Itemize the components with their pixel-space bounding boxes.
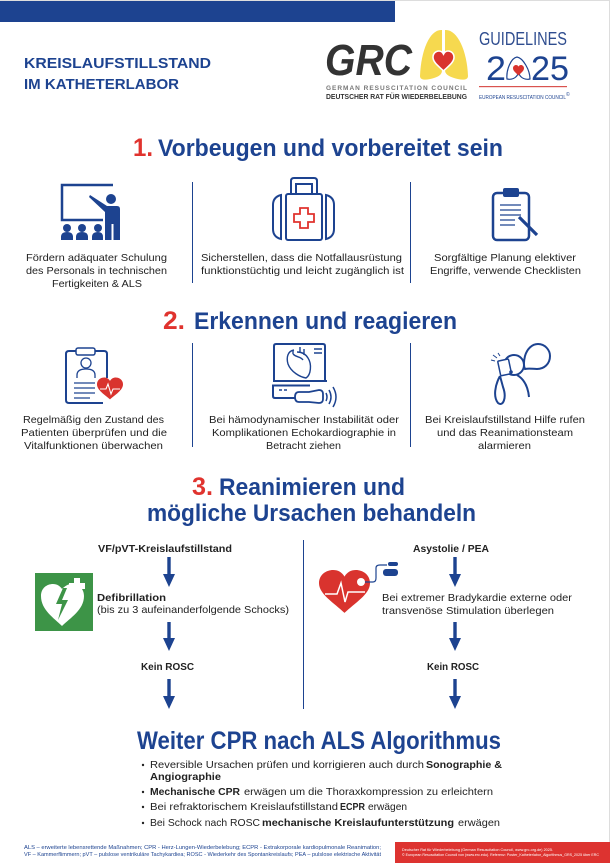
panel: shockable path bbox=[35, 543, 289, 709]
text: bradycardia: Bei extremer Bradykardie externe oder bbox=[382, 592, 573, 604]
bullet list bbox=[142, 759, 502, 829]
label: no ROSC: Kein ROSC bbox=[141, 661, 194, 673]
text: equipment: Sicherstellen, dass die Notfallausrüstung bbox=[201, 252, 402, 264]
text: monitoring: Vitalfunktionen überwachen bbox=[24, 440, 163, 452]
heading 3: mögliche Ursachen behandeln bbox=[147, 500, 476, 527]
logo: Guidelines 2025: 2 bbox=[486, 50, 506, 88]
arrow bbox=[449, 557, 461, 587]
text: equipment: funktionstüchtig und leicht zugänglich ist bbox=[201, 265, 404, 277]
icon: emergency kit bbox=[273, 178, 334, 240]
text: call help bbox=[425, 414, 585, 452]
footer abbreviations: VF – Kammerflimmern; pVT – pulslose ventrikuläre Tachykardiea; ROSC - Wiederkehr des Spontankreislaufs; PEA – pulslose elektrische Aktivität bbox=[24, 852, 382, 858]
title: IM KATHETERLABOR bbox=[24, 76, 179, 93]
bullet list: erwägen um die Thoraxkompression zu erleichtern bbox=[244, 786, 493, 798]
icon: heart with pacemaker bbox=[319, 562, 398, 613]
logo: Guidelines 2025: EUROPEAN RESUSCITATION COUNCIL bbox=[479, 95, 566, 101]
logo: GRC: DEUTSCHER RAT FÜR WIEDERBELEBUNG bbox=[326, 92, 468, 101]
heading 2: Erkennen und reagieren bbox=[194, 308, 457, 335]
icon: AED bbox=[35, 573, 93, 631]
text: monitoring: Regelmäßig den Zustand des bbox=[23, 414, 164, 426]
heading 1: Vorbeugen und vorbereitet sein bbox=[158, 135, 503, 162]
label: VF/pVT: VF/pVT-Kreislaufstillstand bbox=[98, 543, 232, 555]
text: monitoring: Patienten überprüfen und die bbox=[21, 427, 167, 439]
text: echo: Betracht ziehen bbox=[266, 440, 341, 452]
bullet list: Bei Schock nach ROSC bbox=[150, 817, 260, 829]
bullet list: Bei refraktorischem Kreislaufstillstand bbox=[150, 801, 338, 813]
icon: teacher at board bbox=[61, 185, 120, 240]
bullet list: Mechanische CPR bbox=[150, 786, 240, 798]
text: defibrillation: (bis zu 3 aufeinanderfolgende Schocks) bbox=[97, 604, 289, 616]
arrow bbox=[449, 622, 461, 651]
text: planning bbox=[430, 252, 581, 277]
text: training: Fertigkeiten & ALS bbox=[52, 278, 142, 290]
text: training bbox=[26, 252, 167, 290]
heading 2: 2. bbox=[163, 307, 185, 335]
title bbox=[24, 55, 211, 93]
text: planning: Engriffe, verwende Checklisten bbox=[430, 265, 581, 277]
text: monitoring bbox=[21, 414, 167, 452]
heading 3: 3. bbox=[192, 473, 213, 501]
arrow bbox=[163, 557, 175, 587]
text: bradycardia bbox=[382, 592, 573, 617]
heading 1: 1. bbox=[133, 134, 153, 162]
text: defibrillation: Defibrillation bbox=[97, 592, 166, 604]
logo: Guidelines 2025: © bbox=[566, 91, 570, 98]
icon: clipboard checklist bbox=[493, 188, 537, 240]
title: KREISLAUFSTILLSTAND bbox=[24, 55, 211, 72]
panel: recognition row bbox=[21, 343, 585, 452]
bullet list: mechanische Kreislaufunterstützung bbox=[262, 817, 454, 829]
text: planning: Sorgfältige Planung elektiver bbox=[434, 252, 577, 264]
footer abbreviations: ALS – erweiterte lebensrettende Maßnahmen; CPR - Herz-Lungen-Wiederbelebung; ECPR - Extrakorporale kardiopulmonale Reanimation; bbox=[24, 845, 381, 851]
panel: non-shockable path bbox=[319, 543, 573, 709]
footer abbreviations bbox=[24, 845, 382, 858]
text: equipment bbox=[201, 252, 404, 277]
text: call help: und das Reanimationsteam bbox=[437, 427, 573, 439]
label: no ROSC: Kein ROSC bbox=[427, 661, 479, 673]
text: defibrillation bbox=[97, 592, 289, 616]
icon: echocardiography bbox=[273, 344, 336, 407]
icon: person calling for help bbox=[491, 344, 550, 404]
logo: GRC: GERMAN RESUSCITATION COUNCIL bbox=[326, 85, 467, 92]
heading 3 bbox=[147, 473, 476, 527]
arrow bbox=[163, 622, 175, 651]
text: bradycardia: transvenöse Stimulation überlegen bbox=[382, 605, 554, 617]
bullet list: erwägen bbox=[368, 801, 407, 813]
bullet list: Reversible Ursachen prüfen und korrigieren auch durch bbox=[150, 759, 424, 771]
logo: Guidelines 2025: 25 bbox=[531, 50, 569, 88]
icon: patient chart with heart bbox=[66, 348, 123, 403]
text: training: Fördern adäquater Schulung bbox=[26, 252, 167, 264]
logo: GRC bbox=[325, 30, 468, 101]
logo: Guidelines 2025 bbox=[479, 29, 570, 101]
heading: continue CPR: Weiter CPR nach ALS Algorithmus bbox=[137, 727, 501, 755]
arrow bbox=[163, 679, 175, 709]
logo: GRC: GRC bbox=[325, 36, 413, 85]
text: echo bbox=[209, 414, 400, 452]
footer reference box: © European Resuscitation Council von (www.erc.edu). Referenz: Poster_Katheterlabor_Algorithmus_GRS_2025 über ERC bbox=[402, 853, 599, 857]
text: training: des Personals in technischen bbox=[26, 265, 167, 277]
top banner bar bbox=[0, 1, 395, 22]
text: echo: Bei hämodynamischer Instabilität oder bbox=[209, 414, 400, 426]
text: call help: alarmieren bbox=[478, 440, 531, 452]
panel: prevention row bbox=[26, 178, 581, 290]
heading 3: Reanimieren und bbox=[219, 474, 405, 501]
text: echo: Komplikationen Echokardiographie in bbox=[212, 427, 396, 439]
text: call help: Bei Kreislaufstillstand Hilfe rufen bbox=[425, 414, 585, 426]
footer reference box: Deutscher Rat für Wiederbelebung (German Resuscitation Council, www.grc-org.de) 2025. bbox=[402, 848, 553, 852]
arrow bbox=[449, 679, 461, 709]
bullet list: Sonographie & bbox=[426, 759, 502, 771]
bullet list: erwägen bbox=[458, 817, 500, 829]
bullet list: Angiographie bbox=[150, 771, 221, 783]
label: asystole: Asystolie / PEA bbox=[413, 543, 489, 555]
footer reference box bbox=[395, 842, 610, 863]
logo: Guidelines 2025: GUIDELINES bbox=[479, 29, 567, 49]
bullet list: ECPR bbox=[340, 801, 365, 813]
